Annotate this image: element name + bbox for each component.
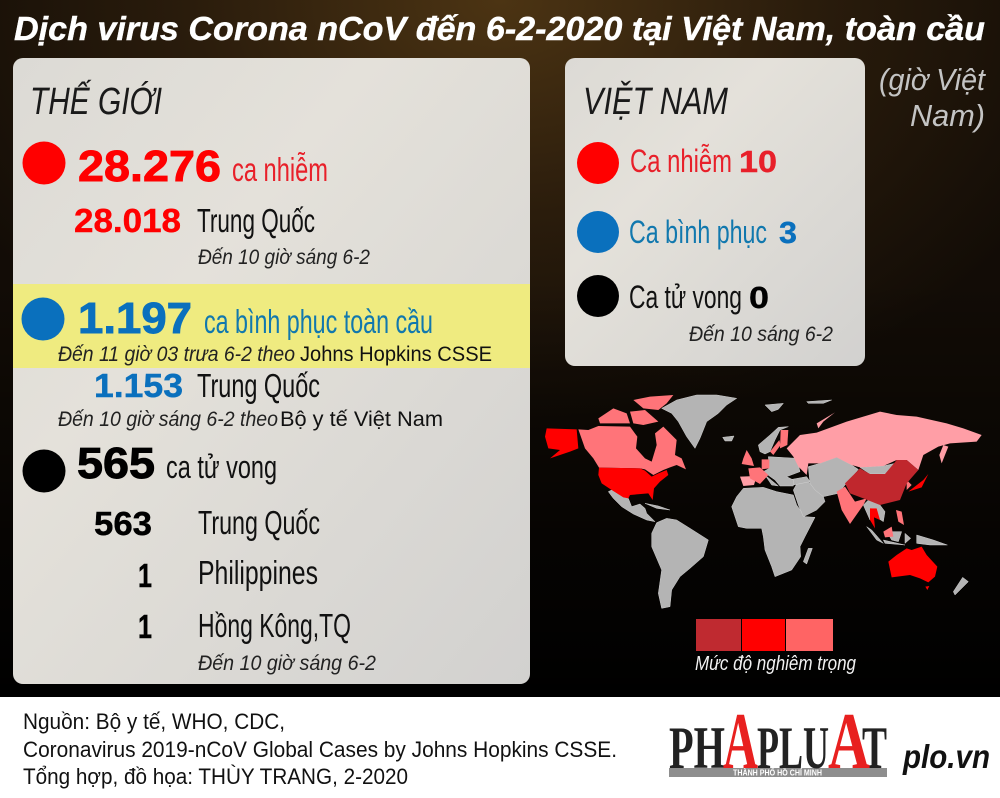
highlight band: recovered worldwide: Johns Hopkins CSSE (300, 343, 492, 366)
Vietnam infected (577, 142, 777, 184)
panel: Vietnam (565, 58, 865, 366)
legend: Mức độ nghiêm trọng (695, 653, 856, 675)
Vietnam deaths (577, 275, 769, 317)
highlight band: recovered worldwide: Đến 11 giờ 03 trưa 6-2 theo (58, 343, 295, 366)
deaths block: Philippines (198, 554, 318, 591)
recovered in China: Bộ y tế Việt Nam (280, 408, 443, 431)
infected block: Đến 10 giờ sáng 6-2 (198, 246, 370, 269)
recovered in China: Trung Quốc (197, 367, 320, 404)
grey countries (608, 395, 968, 608)
world map (545, 395, 982, 608)
recovered in China: 1.153 (94, 367, 183, 404)
time note (879, 62, 986, 133)
infected block: 28.276 (78, 142, 221, 191)
red countries (545, 428, 937, 590)
deaths block: Trung Quốc (198, 504, 320, 541)
time note: (giờ Việt (879, 62, 986, 97)
Vietnam recovered (577, 211, 797, 253)
Vietnam recovered: Ca bình phục (629, 214, 767, 250)
time note: Nam) (910, 98, 985, 133)
Vietnam timestamp: Đến 10 sáng 6-2 (689, 323, 833, 346)
footer (0, 697, 1000, 798)
infected block: 28.018 (74, 202, 181, 239)
logo: Pháp Luật (669, 698, 887, 786)
deaths block: 1 (138, 608, 152, 645)
source text: Nguồn: Bộ y tế, WHO, CDC, (23, 709, 285, 734)
logo: Pháp Luật: PLU (757, 715, 829, 781)
logo: Pháp Luật: THÀNH PHỐ HỒ CHÍ MINH (733, 768, 822, 778)
title: Dịch virus Corona nCoV đến 6-2-2020 tại Việt Nam, toàn cầu (14, 10, 985, 47)
panel: world (13, 58, 530, 684)
deaths block: Hồng Kông,TQ (198, 607, 351, 644)
deaths block: 563 (94, 505, 152, 542)
Vietnam deaths: Ca tử vong (629, 279, 742, 315)
Vietnam infected: Ca nhiễm (630, 143, 732, 179)
Vietnam recovered: 3 (779, 215, 797, 250)
logo: Pháp Luật: PH (669, 715, 725, 781)
Vietnam deaths: 0 (749, 280, 769, 315)
highlight band: recovered worldwide: ca bình phục toàn cầu (204, 303, 433, 340)
lightest pink countries (740, 412, 982, 486)
Vietnam infected: 10 (739, 144, 777, 179)
recovered in China (58, 367, 443, 431)
deaths block: ca tử vong (166, 449, 277, 485)
logo: Pháp Luật: A (828, 698, 870, 786)
source text: Tổng hợp, đồ họa: THÙY TRANG, 2-2020 (23, 764, 408, 789)
logo: Pháp Luật: T (862, 715, 887, 781)
source text (23, 709, 617, 789)
infected block: ca nhiễm (232, 151, 328, 188)
deaths block: Đến 10 giờ sáng 6-2 (198, 652, 376, 675)
heading: world: THẾ GIỚI (30, 79, 162, 123)
logo: Pháp Luật: A (723, 698, 758, 786)
infected block: Trung Quốc (197, 202, 315, 239)
highlight band: recovered worldwide (13, 284, 530, 368)
deaths block: 565 (77, 439, 155, 488)
China (845, 460, 918, 505)
heading: Vietnam: VIỆT NAM (583, 80, 728, 123)
infected block (22, 142, 370, 269)
highlight band: recovered worldwide: 1.197 (78, 294, 192, 343)
source text: Coronavirus 2019-nCoV Global Cases by Johns Hopkins CSSE. (23, 737, 617, 762)
deaths block (22, 439, 376, 675)
site name: plo.vn (902, 738, 990, 775)
medium pink countries (578, 395, 912, 537)
recovered in China: Đến 10 giờ sáng 6-2 theo (58, 408, 278, 431)
legend (695, 619, 856, 675)
deaths block: 1 (138, 557, 152, 594)
